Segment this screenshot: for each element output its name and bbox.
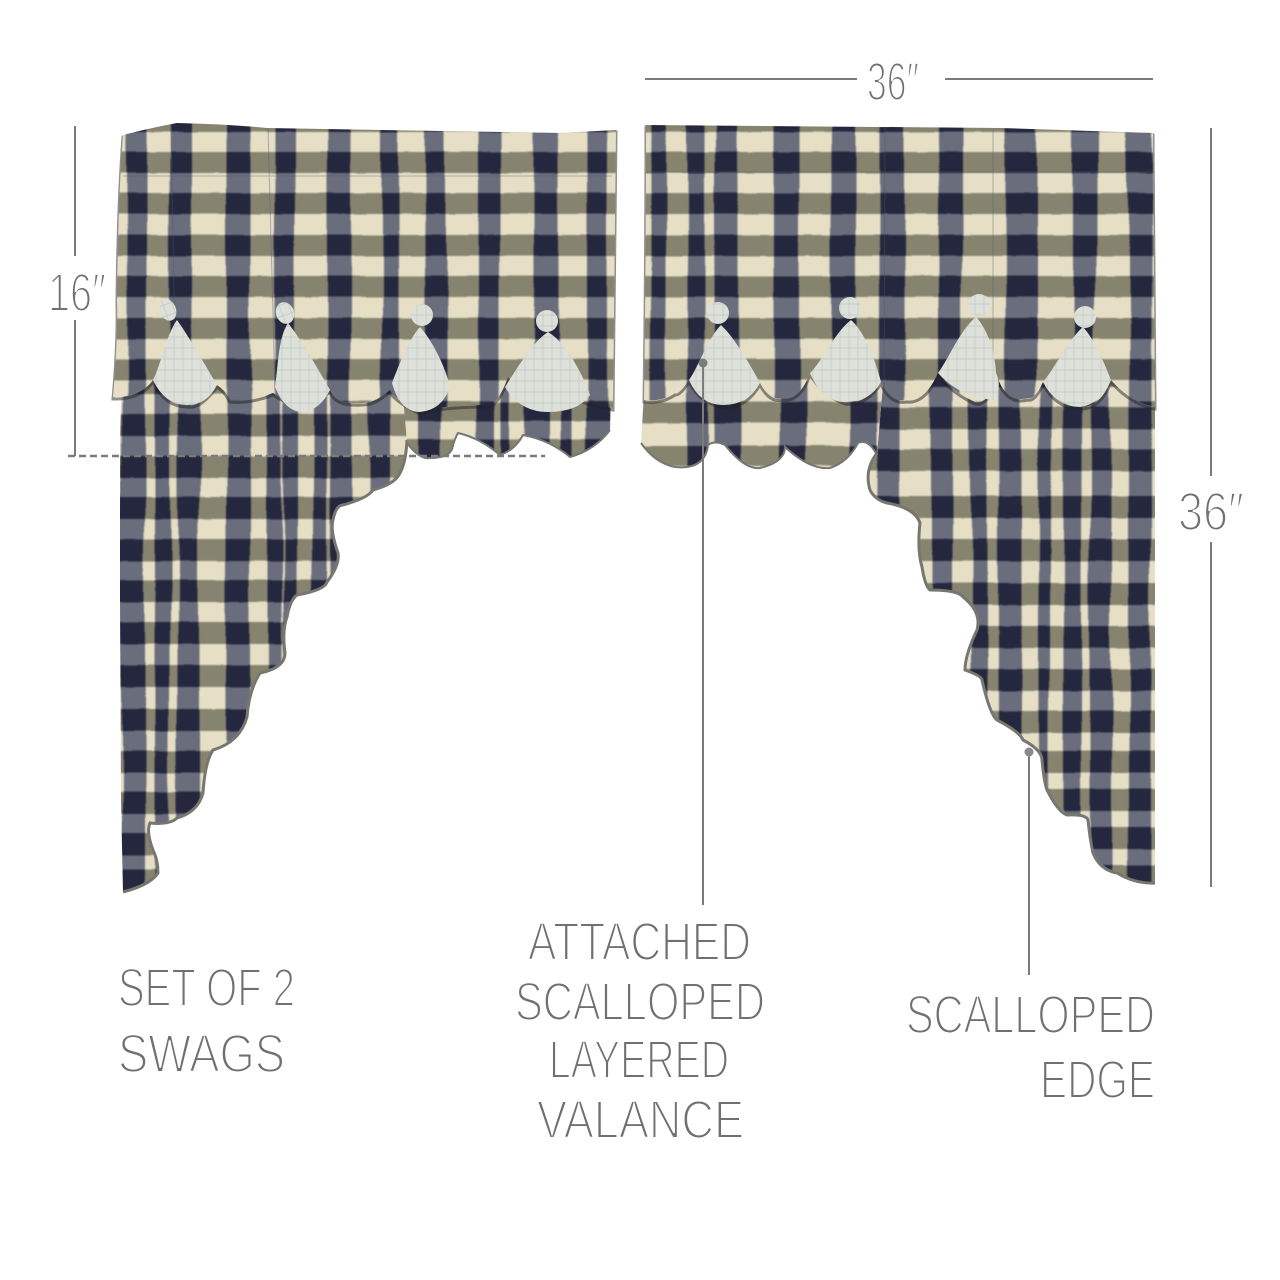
dimension: 16 inch drop: 16″	[48, 263, 106, 323]
left swag attached valance	[111, 123, 618, 416]
label: attached scalloped layered valance: LAYERED	[549, 1030, 729, 1090]
label: attached scalloped layered valance: SCALLOPED	[515, 972, 765, 1032]
right swag tassel appliques	[689, 294, 1111, 407]
dimension: 36 inch length: 36″	[1178, 482, 1244, 542]
callout line: layered valance	[698, 358, 708, 905]
label: set of 2 swags	[118, 958, 295, 1084]
label: attached scalloped layered valance: ATTACHED	[528, 912, 751, 972]
left swag lower body	[120, 380, 408, 894]
label: attached scalloped layered valance	[515, 912, 765, 1150]
label: scalloped edge: SCALLOPED	[906, 985, 1155, 1045]
right swag attached valance	[642, 125, 1156, 411]
right swag lower body	[866, 360, 1156, 885]
left swag tassel appliques	[153, 297, 590, 412]
label: scalloped edge: EDGE	[1040, 1050, 1155, 1110]
left swag curtain	[111, 123, 1094, 894]
label: set of 2 swags: SET OF 2	[118, 958, 295, 1018]
label: attached scalloped layered valance: VALANCE	[537, 1090, 744, 1150]
right swag lower scalloped layer	[640, 374, 883, 470]
callout line: scalloped edge	[1024, 748, 1034, 975]
right swag curtain	[640, 125, 1156, 885]
label: set of 2 swags: SWAGS	[118, 1024, 285, 1084]
left swag lower scalloped layer	[404, 377, 611, 460]
dimension: 36 inch width: 36″	[867, 52, 919, 112]
label: scalloped edge	[906, 985, 1155, 1110]
